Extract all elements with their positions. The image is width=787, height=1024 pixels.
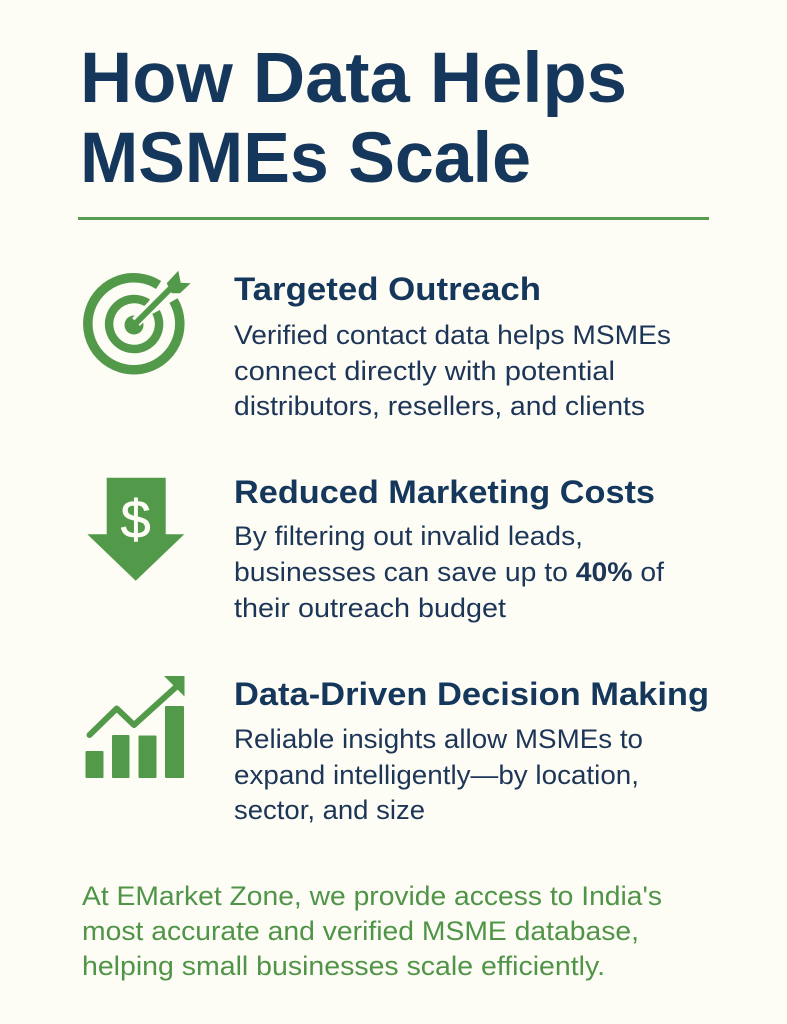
text block: data-driven decision making: Reliable insights allow MSMEs to (234, 724, 643, 754)
footer callout: At EMarket Zone, we provide access to India's (82, 881, 662, 911)
footer callout: most accurate and verified MSME database, (82, 916, 639, 946)
text block: data-driven decision making (234, 724, 643, 825)
title: How Data Helps (80, 39, 627, 118)
title (80, 39, 627, 198)
footer callout: helping small businesses scale efficiently. (82, 951, 605, 981)
text block: targeted outreach: Verified contact data helps MSMEs (234, 320, 671, 350)
text block: reduced marketing costs (234, 521, 665, 623)
icon: target with arrow (88, 271, 191, 370)
footer callout (82, 881, 662, 981)
text block: data-driven decision making: expand intelligently—by location, (234, 760, 639, 790)
panel: targeted outreach (88, 271, 671, 421)
text block: targeted outreach: distributors, resellers, and clients (234, 391, 645, 421)
heading: data-driven decision making: Data-Driven Decision Making (234, 676, 709, 712)
panel: reduced marketing costs (87, 474, 665, 623)
text block: targeted outreach: connect directly with potential (234, 356, 615, 386)
text block: reduced marketing costs: businesses can save up to 40% of (234, 557, 665, 587)
text block: data-driven decision making: sector, and size (234, 795, 425, 825)
heading: targeted outreach: Targeted Outreach (234, 271, 541, 307)
text block: reduced marketing costs: their outreach budget (234, 593, 507, 623)
panel: data-driven decision making (86, 676, 709, 825)
icon: down arrow with dollar (87, 478, 184, 581)
icon: down arrow with dollar: $ (121, 490, 151, 550)
title: MSMEs Scale (80, 119, 531, 198)
heading: reduced marketing costs: Reduced Marketing Costs (234, 474, 655, 510)
text block: targeted outreach (234, 320, 671, 421)
text block: reduced marketing costs: By filtering out invalid leads, (234, 521, 583, 551)
icon: growth chart (86, 676, 184, 778)
